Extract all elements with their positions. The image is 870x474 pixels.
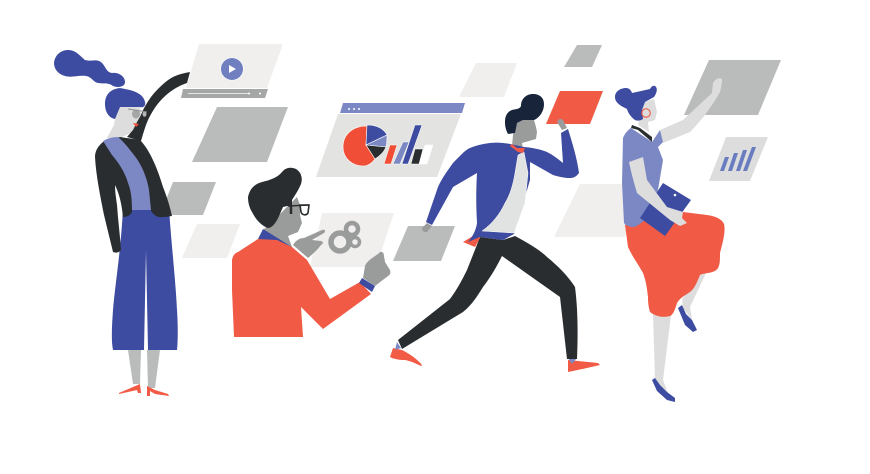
shoes [119,384,141,394]
trousers [398,236,578,359]
glasses [288,205,309,215]
panel: light blank lower left [182,224,240,258]
jacket [426,129,579,242]
collar [510,144,525,153]
hair [615,86,657,121]
figure: woman with tablet [615,78,725,402]
panel: large grey blank [192,107,288,162]
jacket [95,137,172,253]
shoes [652,378,675,402]
icon: gears [331,223,360,251]
fist [363,252,390,286]
face [638,99,657,132]
hair tail [54,50,125,87]
bar chart [384,125,433,164]
socks [395,342,401,350]
panel: small grey blank [160,182,216,215]
panel: gears [310,213,394,267]
panel: grey top small [564,45,602,67]
shirt [482,152,528,233]
figure: woman with wavy hair [54,50,190,396]
hair [505,94,544,134]
panel: video player [181,44,283,98]
panel: red held by running man [546,91,603,124]
cuff [359,278,375,292]
sunglasses [128,109,147,118]
figure: running man [390,94,600,372]
legs [653,314,671,393]
earring [642,109,650,117]
red jacket [232,239,371,337]
hair top [105,88,145,119]
panel: grey under running man's hand [393,226,455,261]
panel: light centre right [554,184,640,237]
collar [631,125,652,142]
legs [128,350,141,384]
shoes [390,348,422,366]
lower arm [629,157,687,226]
lips [133,123,139,127]
hair [248,168,302,228]
figure: man in red jacket [232,168,390,337]
lining [463,233,480,247]
panel: small bar chart [709,137,768,181]
head [107,106,141,138]
shirt [622,128,663,227]
hand left [422,223,432,232]
tablet [640,183,691,236]
raised arm [127,72,190,141]
raised arm [660,78,722,143]
face [263,197,302,247]
shirt sash [103,137,151,210]
panel: large grey top right [684,60,781,115]
hand pointing [293,230,325,258]
panel: light top centre [459,63,517,97]
panel: chart dashboard [316,103,465,177]
hand right [557,119,567,130]
pie chart [343,125,387,166]
skirt [625,212,725,317]
collar [258,229,292,247]
pants [112,208,178,350]
neck and face [512,120,537,150]
